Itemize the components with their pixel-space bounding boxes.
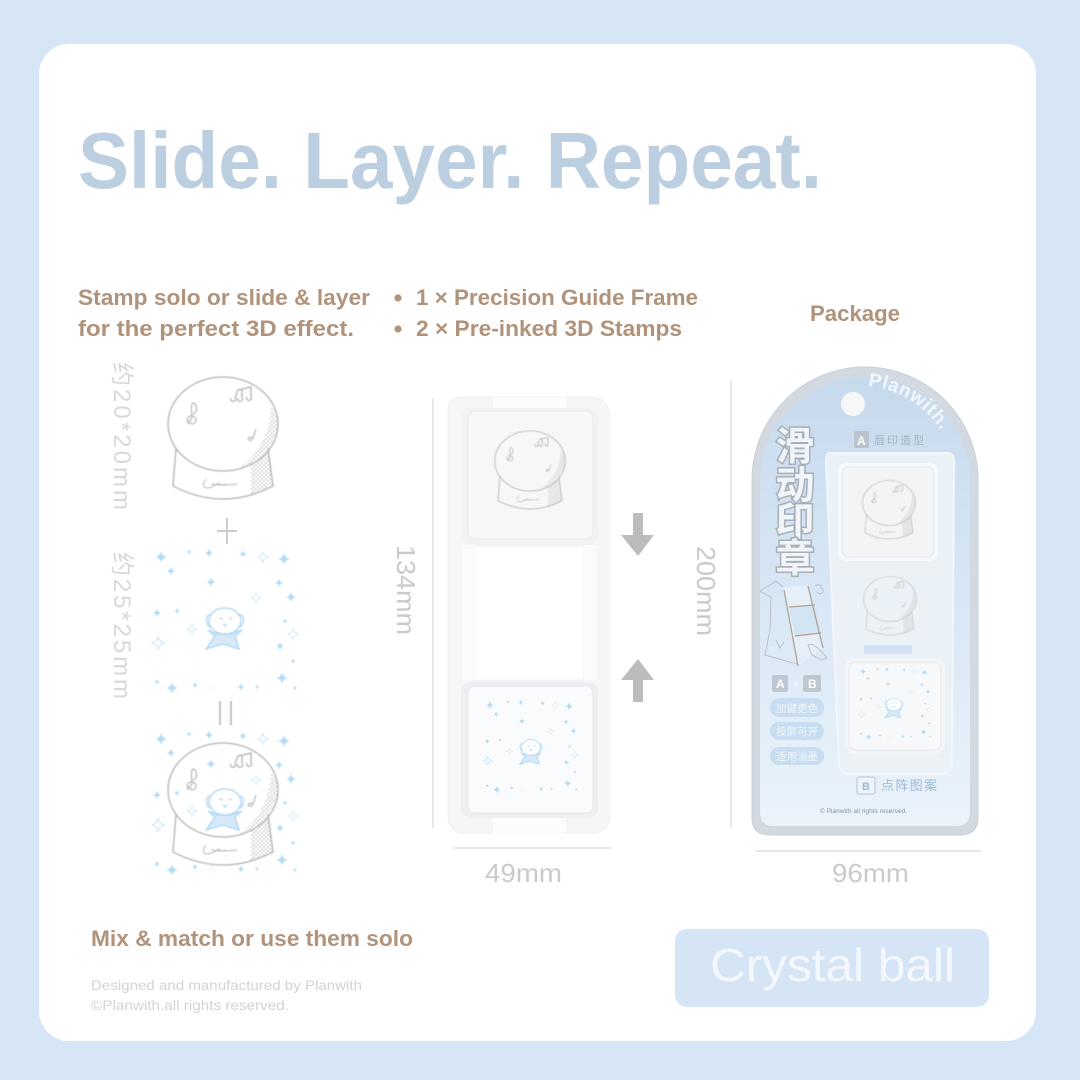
- size label: 20mm stamp: 约20*20mm: [108, 362, 135, 510]
- stamp design: combined result: [151, 731, 298, 876]
- A + B chips: [772, 675, 821, 692]
- feature pills: 适用油墨: [776, 750, 818, 763]
- product name: 章: [775, 538, 815, 581]
- feature pills: 按屏可开: [776, 725, 818, 738]
- title: Slide. Layer. Repeat.: [78, 116, 822, 205]
- package label: Package: [810, 301, 900, 326]
- hanging hole: [841, 392, 865, 416]
- product name: 滑: [775, 426, 815, 469]
- plus sign: [217, 518, 237, 544]
- brand name: Planwith.: [869, 373, 944, 430]
- height dimension: 134mm: 134mm: [391, 545, 421, 635]
- contents bullet list: [394, 285, 698, 341]
- product name: 动: [775, 465, 815, 508]
- stamp design: crystal ball: [168, 377, 278, 499]
- equals sign: [220, 701, 231, 725]
- copyright on card: © Planwith all rights reserved.: [820, 807, 907, 815]
- credits: [91, 977, 362, 1013]
- variant B label: B: [862, 781, 870, 793]
- product name: [775, 426, 815, 581]
- arrow: slide down: [621, 513, 654, 556]
- height dimension: 200mm: 200mm: [691, 546, 721, 636]
- width dimension: 96mm: 96mm: [832, 858, 909, 888]
- description text: for the perfect 3D effect.: [78, 316, 354, 341]
- caption: Mix & match or use them solo: [91, 926, 413, 951]
- A + B chips: +: [792, 677, 799, 691]
- panel: stamp designs: [108, 362, 298, 876]
- packaged stamp A: [838, 463, 938, 561]
- product name: 印: [775, 501, 815, 544]
- packaged stamp B: [845, 658, 945, 754]
- A + B chips: B: [808, 677, 817, 691]
- panel: guide frame with stamps: [448, 397, 610, 833]
- A + B chips: A: [776, 677, 785, 691]
- top stamp: [462, 408, 598, 545]
- hand illustration: [760, 581, 827, 667]
- stamp design: stars and bear: [151, 549, 298, 694]
- blister shell: [752, 367, 978, 835]
- credits: ©Planwith.all rights reserved.: [91, 997, 289, 1013]
- variant B label: [857, 777, 937, 794]
- feature pills: [770, 698, 824, 765]
- clear stamp case: [826, 453, 954, 774]
- variant B label: 点阵图案: [881, 778, 937, 793]
- arrow: slide up: [621, 659, 654, 702]
- contents bullet list: 2 × Pre-inked 3D Stamps: [416, 316, 682, 341]
- description text: Stamp solo or slide & layer: [78, 285, 370, 310]
- variant badge: Crystal ball: [710, 939, 955, 991]
- guide frame: [448, 397, 610, 833]
- credits: Designed and manufactured by Planwith: [91, 977, 362, 993]
- feature pills: 加键更色: [776, 702, 818, 715]
- width dimension: 49mm: 49mm: [485, 858, 562, 888]
- contents bullet list: 1 × Precision Guide Frame: [416, 285, 698, 310]
- variant A label: [854, 431, 924, 448]
- backing card: [760, 377, 970, 826]
- description text: [78, 285, 370, 341]
- variant A label: 唇印造型: [874, 433, 924, 447]
- blue strip: [864, 645, 912, 654]
- panel: retail package: [752, 366, 978, 836]
- centre ball preview: [864, 576, 916, 635]
- variant A label: A: [857, 434, 866, 448]
- bottom stamp: [461, 682, 598, 818]
- size label: 25mm stamp: 约25*25mm: [108, 552, 135, 699]
- variant badge: [675, 929, 989, 1007]
